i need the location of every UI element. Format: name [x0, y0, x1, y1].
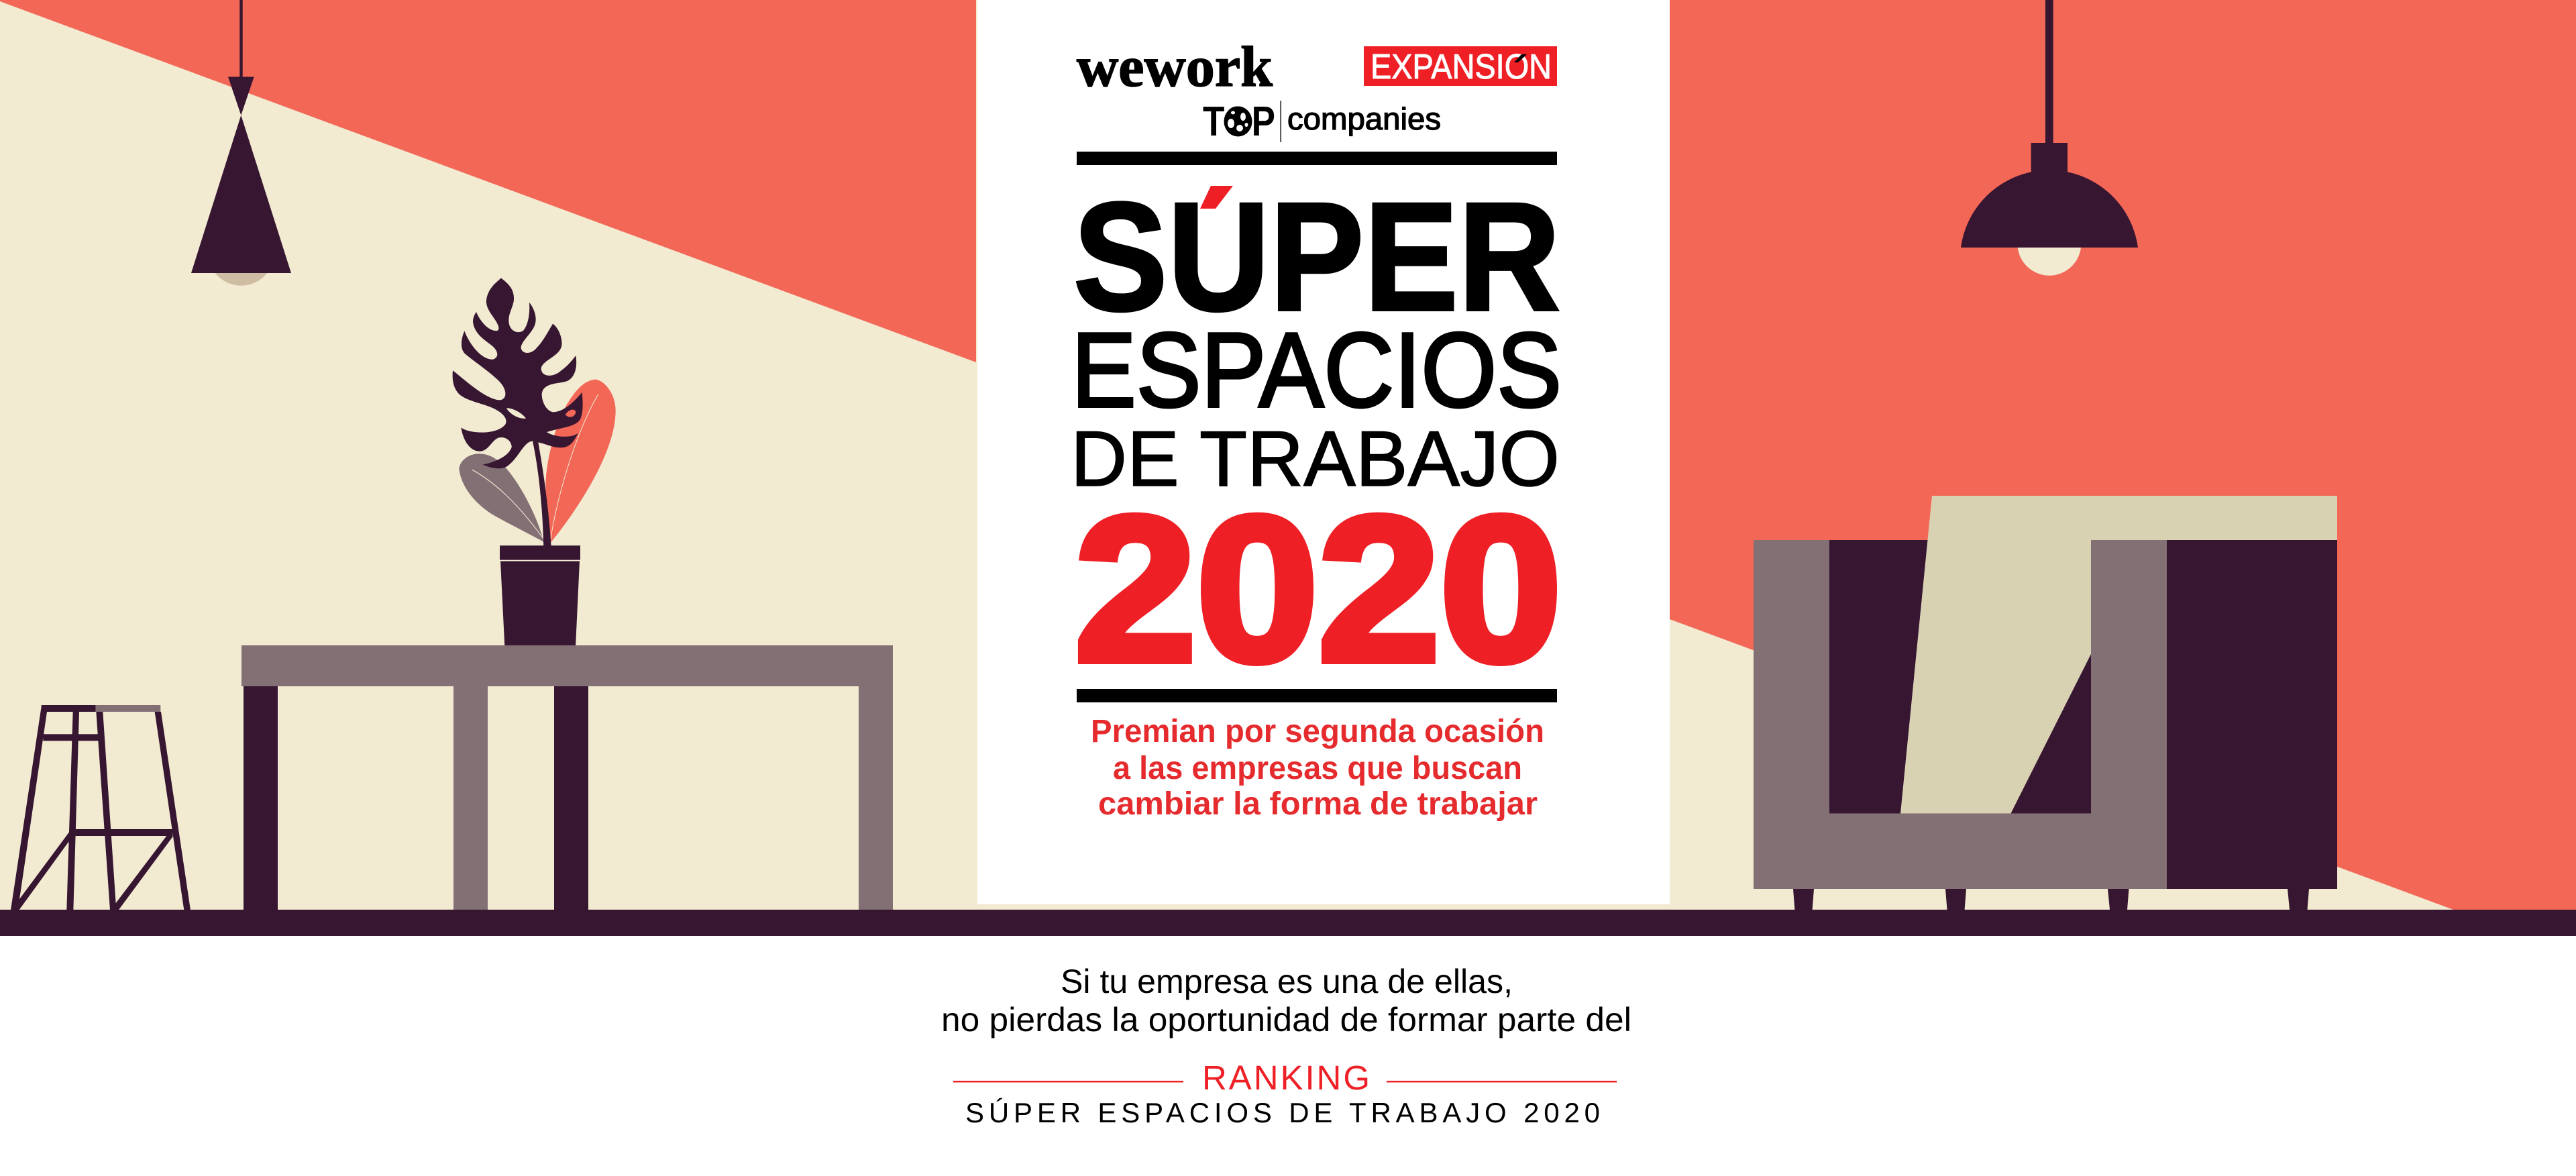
- divider bar top: [1077, 152, 1557, 165]
- subtitle text: cambiar la forma de trabajar: [1098, 786, 1538, 822]
- table: [241, 645, 893, 910]
- background: coral wall right: [1670, 0, 2576, 910]
- call to action text: no pierdas la oportunidad de formar parte del: [941, 1001, 1631, 1038]
- flower pot: [500, 545, 580, 647]
- subtitle text: [1091, 714, 1544, 822]
- background: cream room wall: [0, 0, 2576, 910]
- background: coral wedge left: [0, 0, 976, 362]
- ranking label with rules: RANKING: [1202, 1059, 1370, 1097]
- floor: [0, 910, 2576, 936]
- panel: white title card: [977, 0, 1670, 904]
- subtitle text: Premian por segunda ocasión: [1091, 714, 1544, 749]
- logo: wework: wework: [1077, 34, 1273, 99]
- coral leaf: [545, 380, 616, 542]
- plant stem: [533, 441, 551, 546]
- logo: Top Companies: [1203, 99, 1441, 145]
- ranking name: SÚPER ESPACIOS DE TRABAJO 2020: [965, 1097, 1600, 1128]
- stool: [11, 705, 191, 910]
- gray leaf: [459, 453, 544, 542]
- icon: potted plant: [453, 278, 616, 647]
- chair body gray: [1754, 540, 2167, 889]
- chair side dark: [2167, 540, 2337, 889]
- icon: dome pendant lamp: [1961, 0, 2138, 276]
- heading: Espacios: ESPACIOS: [1071, 311, 1562, 429]
- heading: Súper: SÚPER: [1073, 170, 1560, 343]
- call to action text: Si tu empresa es una de ellas,: [1061, 963, 1513, 1000]
- monstera leaf: [453, 278, 583, 468]
- chair seat back dark: [1829, 540, 2091, 813]
- divider bar bottom: [1077, 689, 1557, 702]
- logo: Top Companies: TOP: [1203, 99, 1275, 145]
- subtitle text: a las empresas que buscan: [1113, 751, 1522, 786]
- call to action text: [941, 963, 1631, 1038]
- heading: Súper: [1076, 186, 1560, 313]
- blanket: [1900, 496, 2337, 813]
- heading: De Trabajo: DE TRABAJO: [1071, 415, 1560, 502]
- icon: cone pendant lamp: [191, 0, 291, 286]
- logo: Top Companies: companies: [1287, 101, 1441, 136]
- chair legs: [1793, 889, 2309, 910]
- armchair: [1754, 496, 2337, 910]
- heading: 2020: 2020: [1075, 474, 1562, 704]
- logo: Expansión: EXPANSIÓN: [1371, 48, 1552, 87]
